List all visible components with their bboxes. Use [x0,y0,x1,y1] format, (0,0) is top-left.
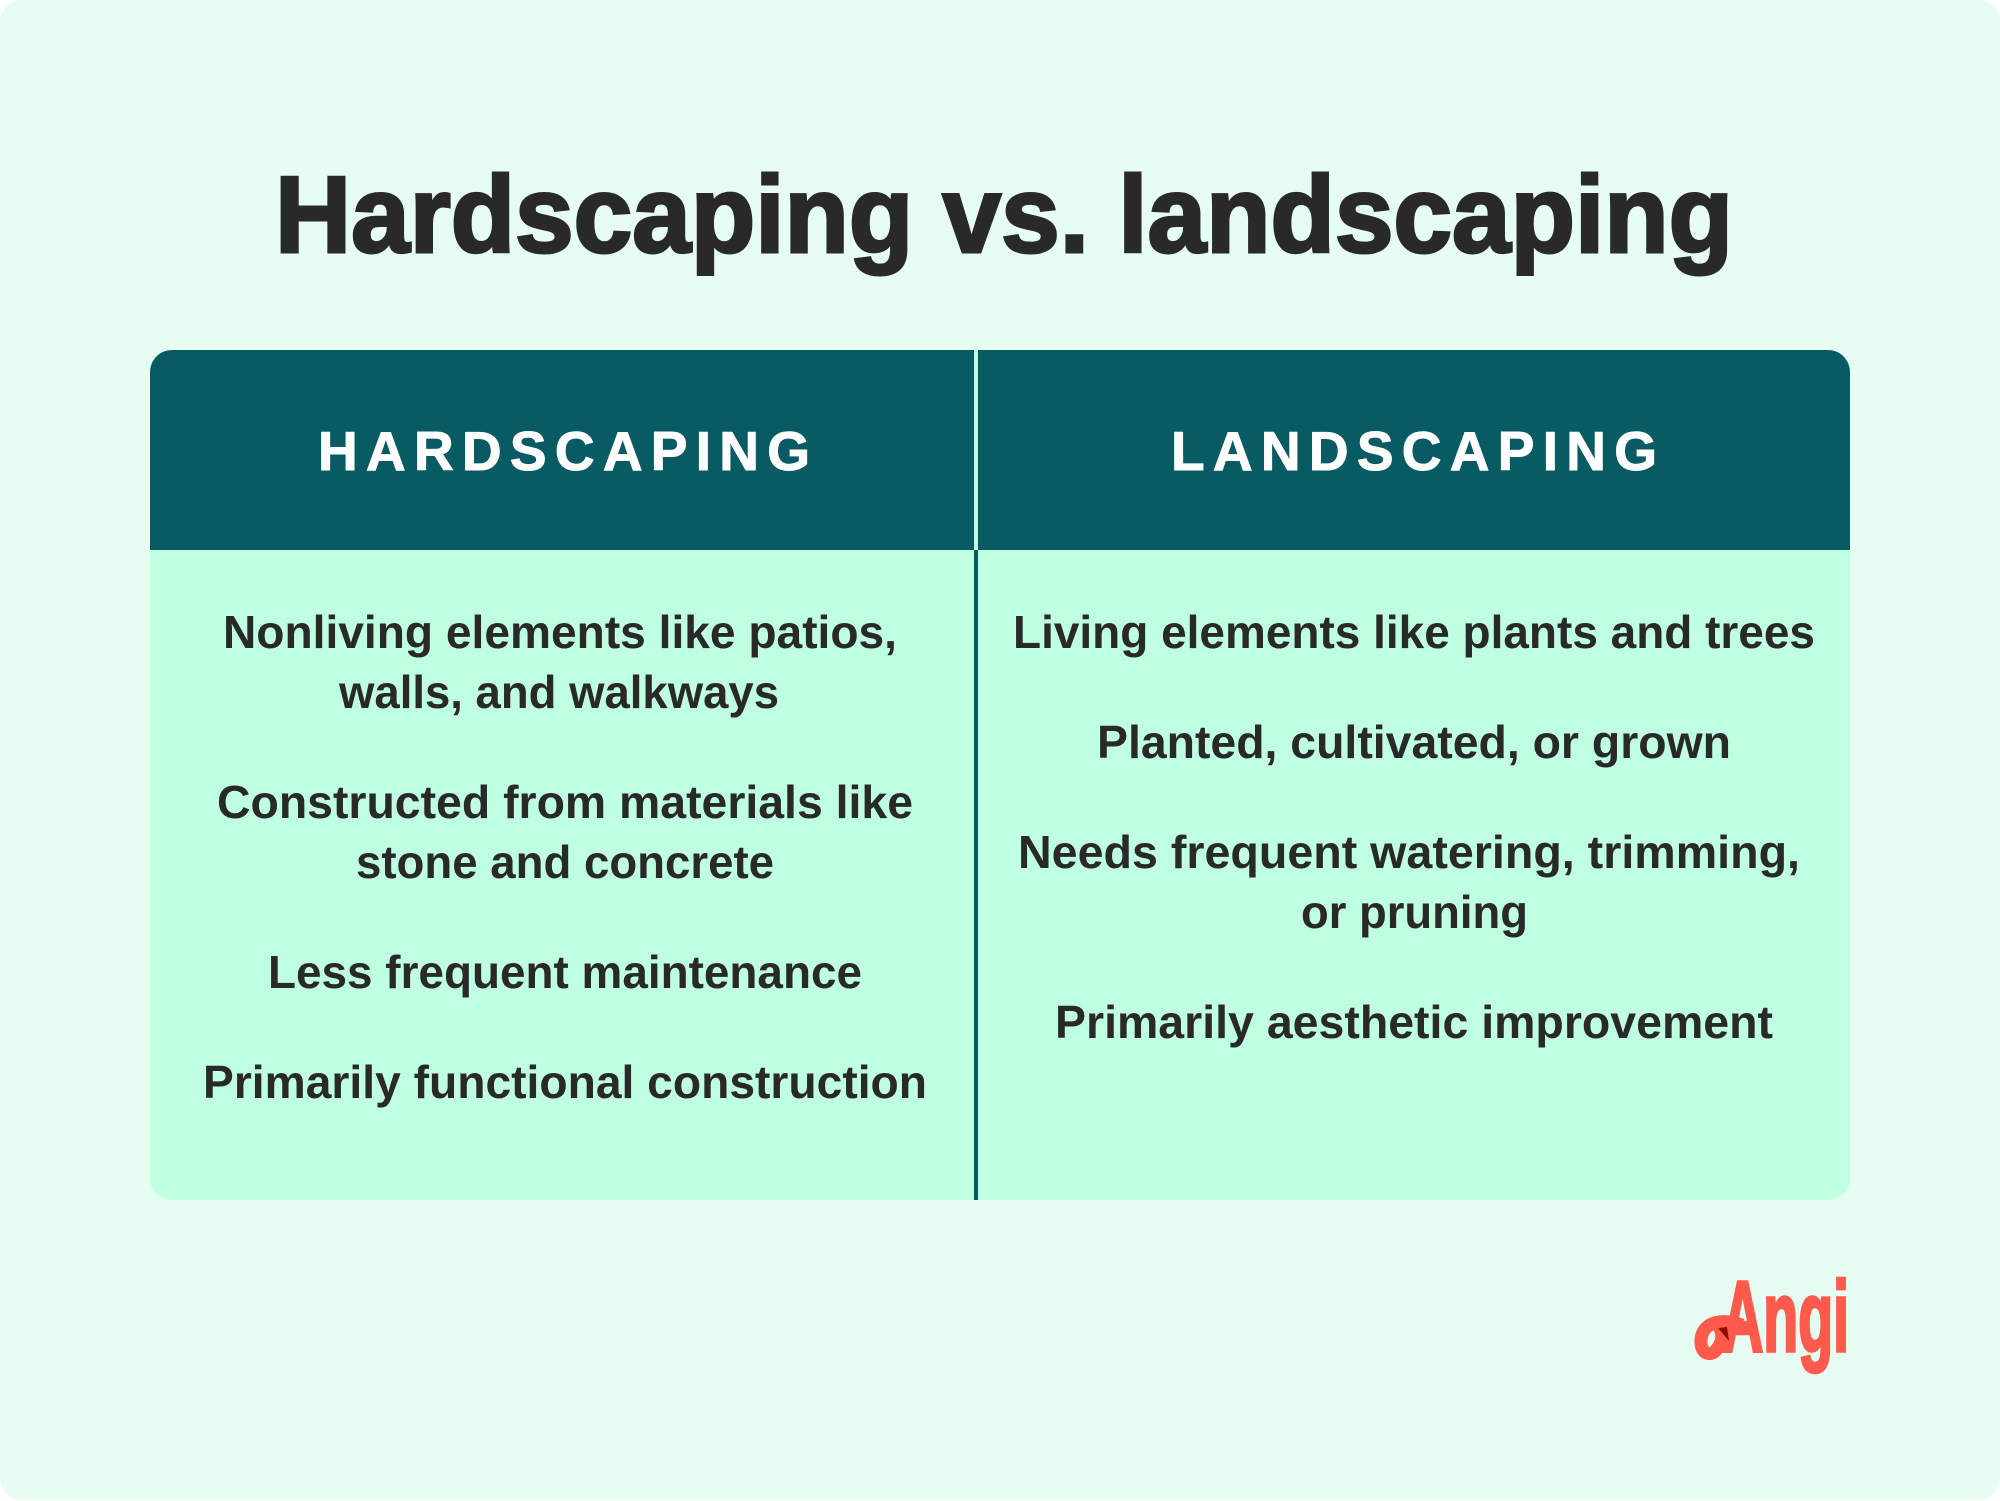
hardscaping column text: Less frequent maintenance [268,946,862,998]
body divider [974,550,978,1200]
column heading: landscaping: LANDSCAPING [1171,420,1657,482]
table body background [150,540,1850,1200]
hardscaping column text: Constructed from materials like [217,776,913,828]
hardscaping column text: stone and concrete [356,836,774,888]
hardscaping column text: Nonliving elements like patios, [223,606,897,658]
hardscaping column text [203,606,927,1108]
landscaping column text: Living elements like plants and trees [1013,606,1815,658]
landscaping column text: Planted, cultivated, or grown [1097,716,1731,768]
hardscaping column text: Primarily functional construction [203,1056,927,1108]
comparison table [150,350,1850,1200]
title: Hardscaping vs. landscaping [275,154,1733,276]
landscaping column text: or pruning [1301,886,1528,938]
hardscaping column text: walls, and walkways [338,666,779,718]
table header band [150,350,1850,550]
logo: Angi: Angi [1722,1261,1849,1373]
header divider [974,350,978,550]
landscaping column text [1013,606,1815,1048]
landscaping column text: Primarily aesthetic improvement [1055,996,1773,1048]
landscaping column text: Needs frequent watering, trimming, [1018,826,1800,878]
column heading: hardscaping: HARDSCAPING [318,420,810,482]
logo: Angi [1701,1261,1849,1373]
